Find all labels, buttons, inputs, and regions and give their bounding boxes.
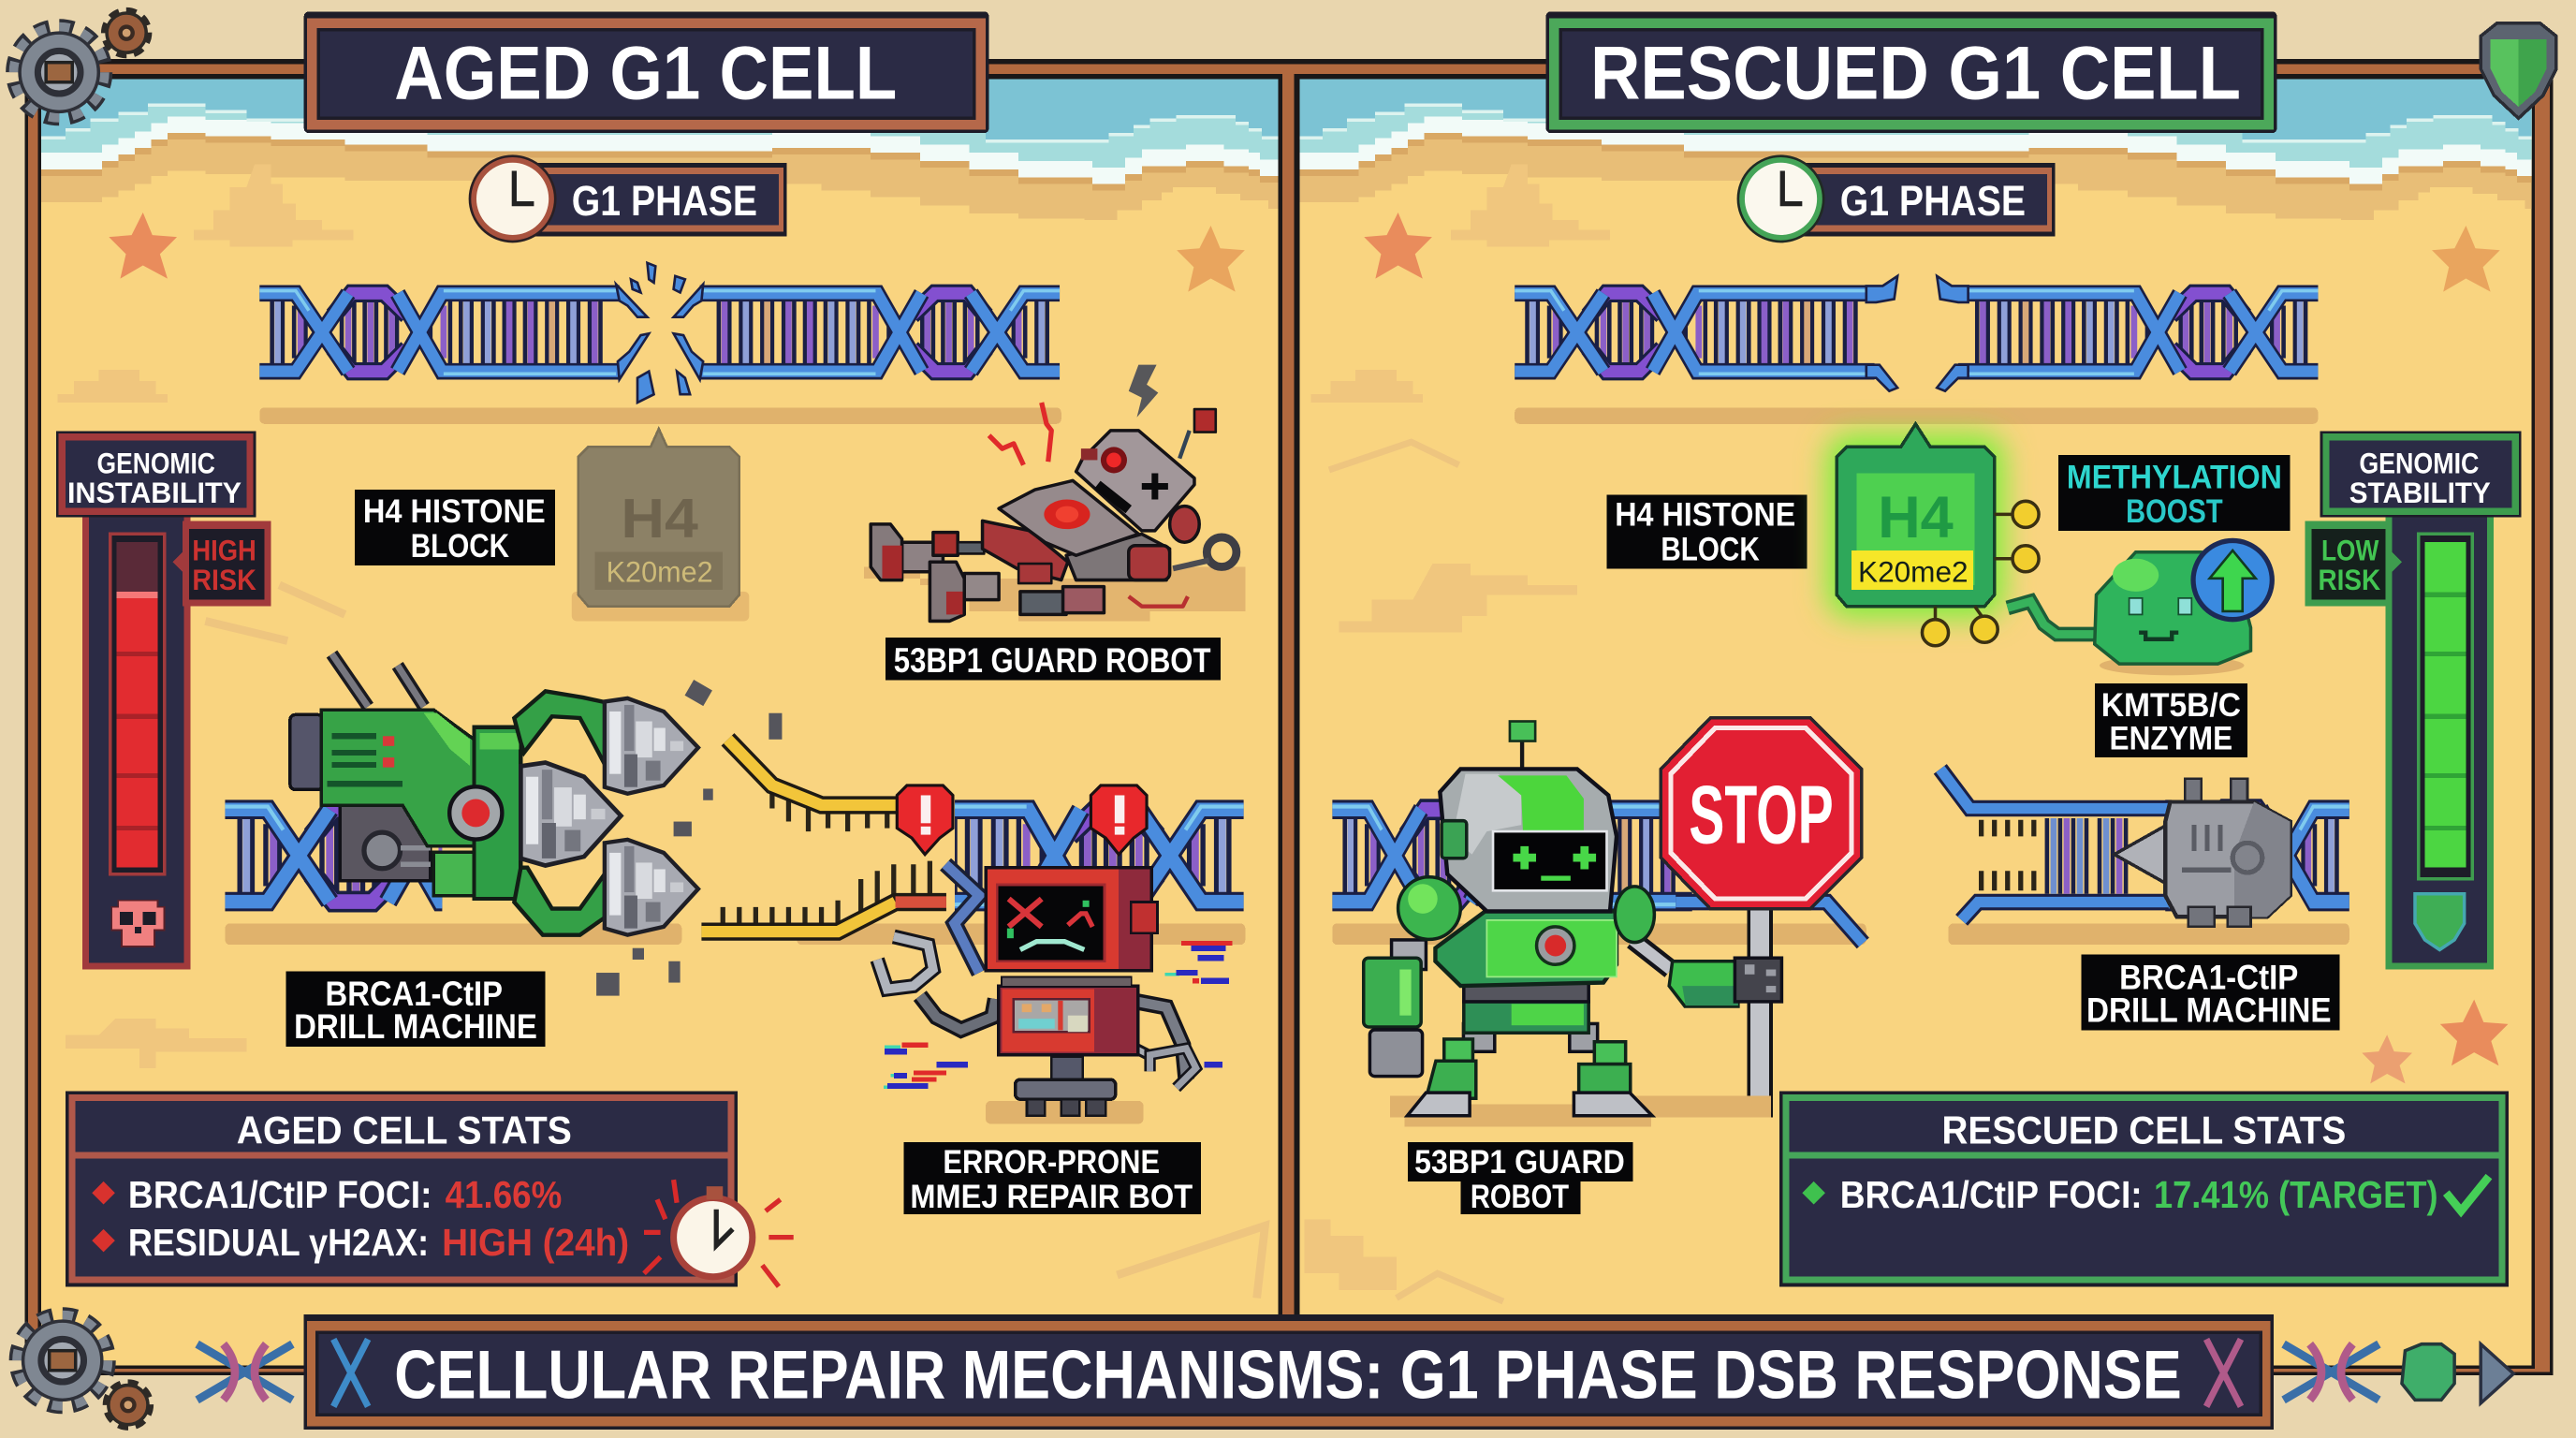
header: GENOMIC [97, 446, 215, 479]
glitch bits [884, 943, 1232, 1087]
head [1076, 431, 1194, 531]
high risk tag: HIGH [192, 534, 256, 567]
banner: main title [304, 1314, 2274, 1430]
icon: alert 1 [897, 785, 953, 855]
head [1440, 769, 1617, 911]
body [999, 986, 1138, 1055]
high risk tag: RISK [192, 563, 256, 596]
header [2321, 433, 2520, 516]
damaged strands: yellow frayed ends [701, 740, 946, 932]
dna: middle strand (rescued) [1332, 769, 2349, 945]
title: rescued G1 cell: RESCUED G1 CELL [1590, 31, 2241, 115]
header [57, 433, 255, 516]
panel: aged cell stats: AGED CELL STATS [237, 1108, 572, 1152]
shoulders [1398, 877, 1460, 939]
starfish right [1364, 213, 1432, 279]
label: 53BP1 guard robot (rescued): ROBOT [1471, 1179, 1570, 1215]
icon: alert 2 [1090, 785, 1147, 855]
label: H4 histone block (rescued) [1606, 494, 1808, 568]
sign: STOP [1661, 718, 1862, 1116]
label: BRCA1-CtIP drill machine (rescued) [2082, 955, 2339, 1030]
badge: rescued G1 phase clock: G1 PHASE [1840, 177, 2026, 225]
badge: aged G1 phase clock [470, 156, 787, 242]
enzyme: KMT5B/C blob [2008, 540, 2272, 675]
machine: BRCA1-CtIP drill (aged) [290, 654, 782, 996]
H4 block: faded: K20me2 [607, 554, 713, 588]
arms [1633, 940, 1671, 970]
label: H4 histone block (rescued): H4 HISTONE [1615, 497, 1795, 534]
arms [945, 864, 979, 973]
methyl groups: yellow dots [1922, 501, 2039, 646]
dna: middle strand (aged) [225, 807, 1245, 945]
gauge: genomic stability [2305, 433, 2520, 970]
header: GENOMIC [2359, 446, 2479, 479]
stat row: residual gH2AX [92, 1221, 629, 1264]
icon: up arrow circle [2193, 540, 2272, 620]
icon: shield [2415, 894, 2465, 949]
H4 block: glowing with K20me2: H4 [1878, 485, 1954, 550]
monitor [986, 868, 1151, 971]
title: aged G1 cell [304, 11, 989, 133]
icon: banner dna right [2206, 1339, 2241, 1406]
header: INSTABILITY [67, 476, 242, 509]
drill bits [605, 698, 698, 794]
low risk tag [2305, 521, 2402, 607]
label: H4 histone block (aged) [355, 490, 555, 565]
panel: aged cell stats [66, 1091, 738, 1286]
dna: clean cut strand (rescued) [1515, 276, 2318, 424]
label: H4 histone block (aged): BLOCK [411, 528, 510, 565]
label: methylation boost [2058, 455, 2291, 531]
label: BRCA1-CtIP drill machine (rescued): BRCA1-CtIP [2119, 959, 2298, 997]
stat row: foci: BRCA1/CtIP FOCI: [128, 1173, 432, 1216]
icon: alarm stopwatch [644, 1180, 794, 1286]
label: KMT5B/C enzyme: ENZYME [2110, 720, 2232, 756]
label: error-prone MMEJ repair bot: MMEJ REPAIR BOT [910, 1179, 1193, 1215]
robot: 53BP1 guard (rescued) [1364, 722, 1781, 1126]
stand [1051, 1057, 1083, 1081]
panel: aged cell beach [41, 79, 1278, 1366]
body [1066, 534, 1170, 580]
label: 53BP1 guard robot (rescued) [1408, 1142, 1633, 1215]
label: methylation boost: BOOST [2126, 493, 2223, 530]
icon: shield top right [2481, 23, 2556, 118]
pelvis [1464, 1002, 1588, 1033]
low risk tag: LOW [2321, 534, 2379, 567]
dna: broken strand (aged) [259, 263, 1061, 424]
H4 block: faded: H4 [621, 487, 698, 550]
header: STABILITY [2349, 476, 2491, 509]
sign: STOP: STOP [1689, 769, 1834, 860]
label: BRCA1-CtIP drill machine (aged): DRILL MACHINE [294, 1007, 537, 1046]
icon: banner dna left [333, 1339, 368, 1406]
label: KMT5B/C enzyme [2095, 683, 2247, 757]
break shards [616, 263, 703, 403]
icon: skull [111, 901, 165, 946]
gear arm [1207, 537, 1237, 567]
stat row: foci: 41.66% [446, 1173, 562, 1216]
stat row: foci: BRCA1/CtIP FOCI: [1840, 1173, 2143, 1216]
gauge: genomic instability [57, 433, 271, 970]
claws [514, 691, 606, 764]
legs [1463, 1023, 1495, 1051]
sparks [989, 403, 1051, 465]
stat row: foci [92, 1173, 562, 1216]
low risk tag: RISK [2318, 563, 2380, 596]
debris [596, 680, 782, 996]
banner: main title: CELLULAR REPAIR MECHANISMS: G1 PHASE DSB RESPONSE [394, 1336, 2182, 1414]
H4 block: glowing with K20me2: K20me2 [1858, 554, 1969, 588]
label: H4 histone block (rescued): BLOCK [1661, 532, 1760, 568]
panel: rescued cell stats [1779, 1091, 2509, 1286]
label: error-prone MMEJ repair bot [903, 1142, 1201, 1215]
high risk tag [172, 521, 271, 607]
label: error-prone MMEJ repair bot: ERROR-PRONE [943, 1144, 1160, 1181]
robot: fallen 53BP1 guard [864, 365, 1245, 621]
legs [902, 542, 943, 572]
label: BRCA1-CtIP drill machine (aged) [285, 971, 546, 1047]
lower mechanics [340, 805, 431, 881]
badge: aged G1 phase clock: G1 PHASE [572, 177, 757, 225]
label: BRCA1-CtIP drill machine (rescued): DRILL MACHINE [2086, 991, 2331, 1030]
icon: gears top left [17, 13, 146, 115]
robot: error-prone MMEJ repair bot [877, 864, 1232, 1124]
H4 block: faded [572, 429, 749, 621]
label: methylation boost: METHYLATION [2067, 459, 2282, 495]
stat row: foci [1802, 1173, 2489, 1216]
title: aged G1 cell: AGED G1 CELL [394, 31, 897, 115]
tan mask outside frame bottom [0, 1377, 2576, 1438]
bottom frame gears and icons left [20, 1318, 292, 1425]
stat row: residual gH2AX: RESIDUAL γH2AX: [128, 1221, 429, 1264]
panel: rescued cell stats: RESCUED CELL STATS [1942, 1108, 2346, 1152]
label: H4 histone block (aged): H4 HISTONE [363, 493, 546, 530]
label: KMT5B/C enzyme: KMT5B/C [2101, 687, 2241, 724]
H4 block: glowing with K20me2 [1827, 424, 2004, 618]
machine: idle gray drill (rescued) [2115, 779, 2291, 927]
stat row: foci: 17.41% (TARGET) [2154, 1173, 2438, 1216]
label: 53BP1 guard robot (aged): 53BP1 GUARD ROBOT [894, 641, 1211, 680]
torso [1435, 911, 1617, 986]
stat row: residual gH2AX: HIGH (24h) [442, 1221, 629, 1264]
bottom frame icons right [2284, 1344, 2513, 1403]
panel: rescued cell beach [1298, 79, 2535, 1366]
label: 53BP1 guard robot (rescued): 53BP1 GUARD [1414, 1144, 1625, 1181]
label: BRCA1-CtIP drill machine (aged): BRCA1-CtIP [326, 975, 503, 1013]
title: rescued G1 cell [1546, 11, 2277, 133]
starfish left [109, 213, 177, 279]
center divider [1278, 64, 1299, 1323]
badge: rescued G1 phase clock [1738, 156, 2056, 242]
